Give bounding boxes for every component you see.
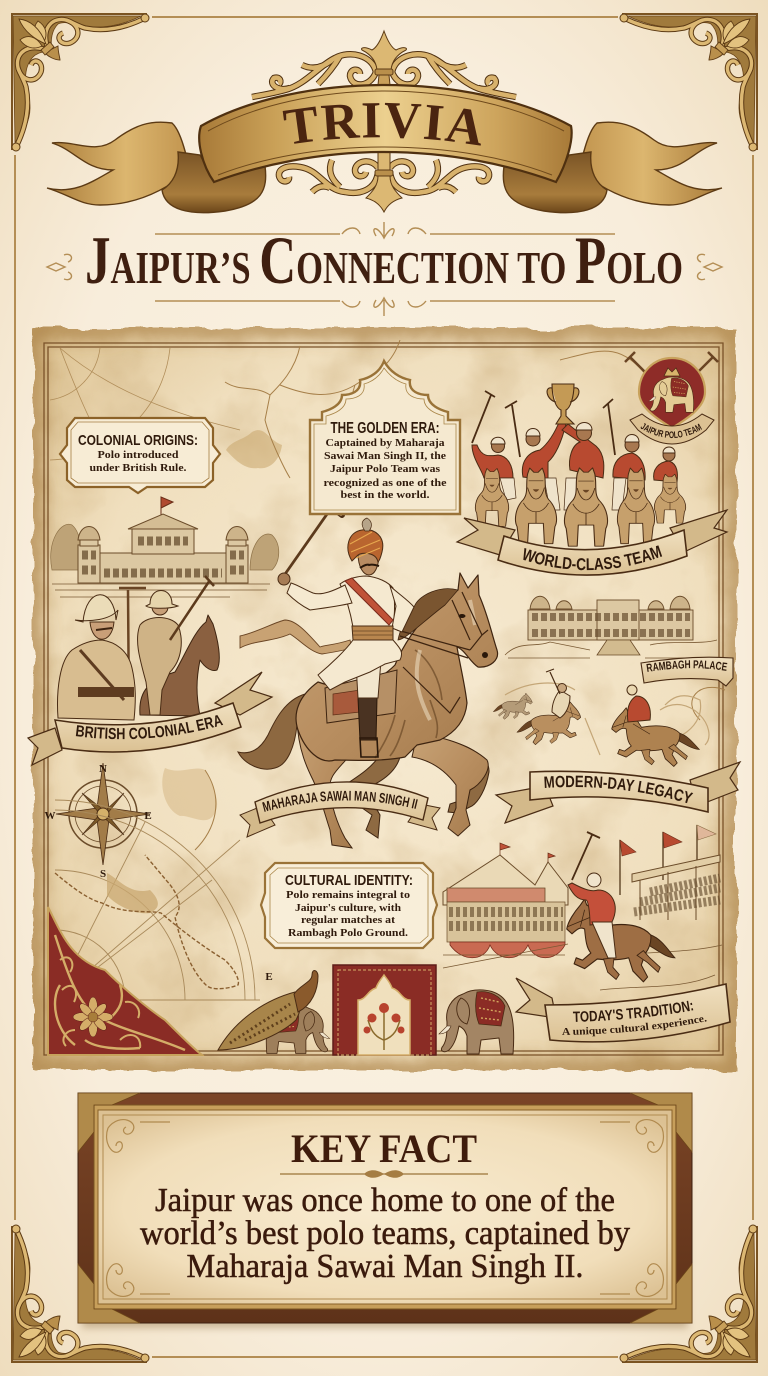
callout: cultural identity: Rambagh Polo Ground.	[288, 927, 408, 939]
centre player	[517, 702, 581, 745]
hero: Maharaja on horseback	[238, 500, 498, 848]
callout: the golden era: recognized as one of the	[324, 477, 447, 489]
subtitle ornaments	[47, 222, 722, 316]
scene: colonial palace	[51, 497, 279, 597]
key fact body: world’s best polo teams, captained by	[140, 1215, 630, 1252]
callout: the golden era	[310, 361, 460, 514]
rider 1	[472, 437, 516, 526]
wooden frame	[78, 1093, 692, 1323]
rider coat skirt	[318, 640, 402, 690]
key fact body: Maharaja Sawai Man Singh II.	[186, 1248, 584, 1285]
compass rose: W	[44, 810, 56, 822]
corner ornament: top left	[12, 14, 149, 151]
canopy	[447, 888, 545, 902]
ribbon: world-class team	[456, 508, 728, 576]
scene: Rambagh Palace	[505, 596, 717, 658]
scene: British officers	[58, 576, 219, 720]
ribbon: Maharaja Sawai Man Singh II	[239, 781, 441, 838]
scene: grandstand with flags	[590, 825, 722, 990]
tail	[238, 694, 305, 769]
callout: colonial origins: COLONIAL ORIGINS:	[78, 432, 198, 449]
callout: the golden era: best in the world.	[340, 489, 430, 501]
bridle and reins	[397, 592, 488, 713]
scroll flourishes	[107, 1120, 663, 1296]
icon: red arch panel	[333, 965, 436, 1055]
divider	[280, 1173, 488, 1175]
saddle cloth	[325, 670, 397, 723]
mane	[398, 589, 458, 640]
callout: cultural identity: Polo remains integral to	[286, 889, 411, 901]
crowd	[447, 902, 565, 942]
ribbon: British colonial era: BRITISH COLONIAL ERA	[76, 715, 224, 740]
torn paper sheet	[33, 328, 736, 1070]
callout: cultural identity: Jaipur's culture, with	[295, 902, 401, 914]
right ribbon tail	[579, 122, 722, 205]
compass rose: N	[99, 763, 107, 775]
label: Rambagh Palace: RAMBAGH PALACE	[646, 660, 728, 672]
ribbon: modern-day legacy: MODERN-DAY LEGACY	[544, 776, 694, 804]
crest: Jaipur polo team: JAIPUR POLO TEAM	[640, 423, 702, 438]
left ribbon tail	[47, 122, 190, 205]
rider 4	[612, 434, 655, 544]
far foreleg	[440, 740, 489, 813]
horse muscle shading	[375, 650, 442, 758]
rider torso	[340, 576, 395, 627]
panel shadow	[82, 1100, 688, 1328]
label: Rambagh Palace	[640, 656, 734, 687]
mallet	[283, 507, 332, 577]
scene: polo stands and tents	[443, 843, 568, 968]
icon: peacock on elephant	[218, 971, 330, 1054]
near hind leg	[297, 720, 352, 848]
antique map: E	[265, 971, 273, 983]
turban	[348, 530, 383, 562]
top filigree	[252, 31, 516, 97]
sash	[345, 578, 393, 625]
near foreleg	[412, 735, 488, 836]
icon: elephant	[439, 990, 514, 1054]
callout: the golden era: Jaipur Polo Team was	[330, 463, 441, 475]
boot	[358, 698, 377, 740]
crest: Jaipur polo team	[624, 351, 718, 444]
trees	[51, 524, 279, 570]
subtitle: JAIPUR’S CONNECTION TO POLO	[85, 222, 683, 298]
polo team group	[472, 384, 686, 546]
right ribbon fold	[503, 152, 607, 213]
mallet held by standing officer	[119, 588, 146, 720]
rider 5	[654, 447, 686, 523]
corner ornament: top right	[620, 14, 757, 151]
flower motif	[368, 1012, 400, 1050]
compass rose	[44, 763, 152, 880]
ribbon: modern-day legacy	[494, 760, 742, 824]
parchment	[98, 1110, 672, 1304]
horse body	[296, 573, 498, 761]
title banner	[46, 30, 722, 214]
TRIVIA heading: TRIVIA	[282, 102, 481, 146]
flag	[161, 497, 173, 522]
carpet flower	[73, 997, 113, 1037]
ribbon: today's tradition: A unique cultural experience.	[562, 1017, 707, 1036]
belt	[352, 626, 393, 640]
ribbon: British colonial era	[27, 672, 274, 766]
scene: today's polo player	[567, 832, 675, 982]
callout: the golden era: THE GOLDEN ERA:	[330, 420, 440, 437]
compass rose: E	[144, 810, 152, 822]
mounted officer's horse	[140, 615, 219, 716]
callout: colonial origins: under British Rule.	[90, 462, 187, 474]
compass rose: S	[100, 868, 106, 880]
ribbon: today's tradition	[514, 978, 731, 1043]
palace building	[78, 514, 248, 583]
striped tents	[443, 855, 568, 905]
scene: modern polo players	[493, 669, 709, 766]
inner map frame	[44, 343, 723, 1055]
feather	[362, 518, 371, 531]
distant player	[493, 693, 532, 719]
corner: red floral carpet	[48, 907, 202, 1055]
flowing scarf	[240, 620, 352, 654]
key fact panel	[78, 1093, 692, 1328]
corner ornament: bottom left	[12, 1225, 149, 1362]
ribbon: world-class team: WORLD-CLASS TEAM	[523, 545, 662, 570]
centre ribbon band	[199, 85, 572, 182]
antique map	[55, 800, 273, 1000]
callout: cultural identity: regular matches at	[301, 914, 395, 926]
ribbon: today's tradition: TODAY'S TRADITION:	[572, 1000, 694, 1022]
callout: cultural identity: CULTURAL IDENTITY:	[285, 872, 413, 889]
mallets	[472, 391, 615, 457]
red shirt player	[612, 708, 699, 766]
callout: the golden era: Captained by Maharaja	[326, 437, 445, 449]
corner ornament: bottom right	[620, 1225, 757, 1362]
gold corner plates	[78, 1093, 692, 1323]
callout: colonial origins	[60, 418, 220, 493]
left ribbon fold	[162, 152, 266, 213]
callout: the golden era: Sawai Man Singh II, the	[324, 450, 446, 462]
rider 3	[562, 422, 608, 546]
callout: colonial origins: Polo introduced	[98, 449, 178, 461]
trousers	[356, 660, 381, 698]
raised arm	[287, 583, 352, 610]
face	[358, 553, 379, 575]
key fact body: Jaipur was once home to one of the	[155, 1182, 615, 1219]
standing officer	[58, 640, 135, 720]
ribbon: Maharaja Sawai Man Singh II: MAHARAJA SAWAI MAN SINGH II	[262, 790, 418, 812]
paper cracks and stains	[50, 340, 725, 850]
key fact heading: KEY FACT	[291, 1126, 477, 1171]
far hind leg	[345, 755, 400, 838]
trophy	[547, 384, 579, 424]
parchment map panel	[33, 328, 736, 1070]
rider 2	[515, 420, 566, 544]
mounted officer	[138, 618, 181, 715]
hand	[278, 573, 290, 585]
right arm	[390, 586, 414, 632]
bunting	[450, 942, 565, 958]
bottom filigree	[279, 152, 489, 212]
callout: cultural identity	[261, 863, 437, 948]
gold inner frame	[94, 1105, 676, 1309]
key fact body	[140, 1182, 630, 1285]
